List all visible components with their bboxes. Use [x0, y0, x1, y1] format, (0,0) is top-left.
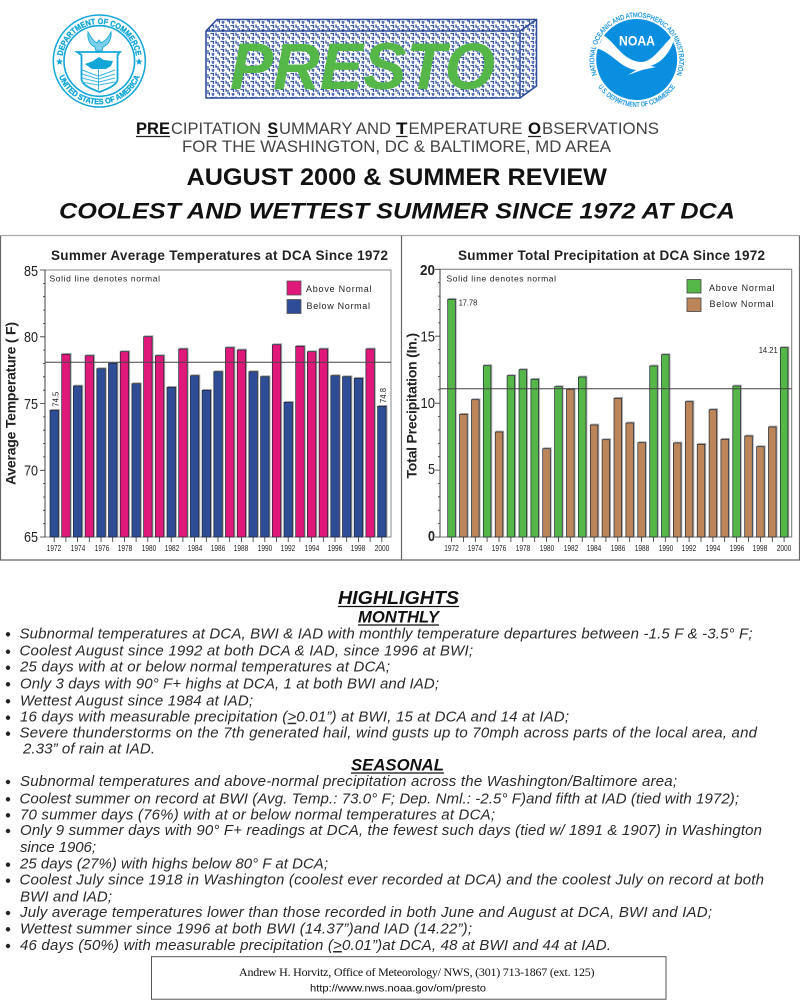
text block: seasonal bullets: 46 days (50%) with measurable precipitation (>0.01”)at DCA, 48 at BWI and 44 at IAD.	[20, 937, 611, 954]
icon: Department of Commerce seal: UNITED STATES OF AMERICA	[59, 74, 140, 104]
axis labels: temperature years: 1984	[188, 544, 203, 553]
panel: precipitation chart	[404, 248, 792, 553]
axis labels: temperature values	[24, 263, 38, 546]
icon: NOAA logo	[589, 12, 684, 107]
text block: seasonal bullets: Coolest July since 1918 in Washington (coolest ever recorded at DCA) and the coolest July on record at both	[20, 872, 764, 889]
axis title: precipitation: Total Precipitation (In.)	[404, 333, 420, 478]
text block: seasonal bullets: BWI and IAD;	[20, 888, 112, 905]
axis labels: precipitation years: 1976	[492, 544, 507, 553]
logo: PRESTO block: PRESTO	[230, 29, 495, 103]
label: 2000 temperature: 74.8	[378, 388, 388, 403]
heading: summary subtitle: COOLEST AND WETTEST SUMMER SINCE 1972 AT DCA	[59, 198, 735, 224]
text block: seasonal bullets: Only 9 summer days with 90° F+ readings at DCA, the fewest such days (tied w/ 1891 & 1907) in Washington	[20, 822, 762, 839]
text block: monthly bullets: Severe thunderstorms on the 7th generated hail, wind gusts up to 70mph across parts of the local area, and	[20, 725, 758, 742]
axis labels: precipitation years: 1990	[659, 544, 674, 553]
text block: seasonal bullets	[6, 773, 764, 954]
axis labels: temperature years: 1976	[95, 544, 110, 553]
bars: precipitation by year	[448, 299, 788, 537]
axis labels: precipitation years: 1980	[540, 544, 555, 553]
icon: Department of Commerce seal	[52, 14, 146, 108]
axis labels: temperature years: 1988	[234, 544, 249, 553]
heading: monthly: MONTHLY	[358, 609, 441, 627]
axis labels: temperature values: 65	[24, 529, 38, 546]
heading: seasonal: SEASONAL	[351, 757, 444, 775]
axis labels: temperature years: 1992	[281, 544, 296, 553]
axis labels: precipitation years: 1984	[587, 544, 602, 553]
axis labels: temperature years: 2000	[375, 544, 390, 553]
axis labels: precipitation values: 10	[420, 395, 435, 412]
heading: program name: T	[396, 120, 408, 138]
icon: Department of Commerce seal: DEPARTMENT OF COMMERCE	[57, 18, 142, 56]
heading: program name: S	[268, 120, 278, 138]
axis labels: temperature values: 75	[24, 396, 38, 413]
text block: monthly bullets: 2.33” of rain at IAD.	[22, 740, 155, 757]
text block: monthly bullets: 16 days with measurable precipitation (>0.01”) at BWI, 15 at DCA and 14 at IAD;	[20, 709, 569, 726]
axis labels: precipitation years: 1986	[611, 544, 626, 553]
axis labels: precipitation years: 1992	[682, 544, 697, 553]
axis labels: precipitation years: 1982	[564, 544, 579, 553]
axis labels: temperature years: 1994	[305, 544, 320, 553]
axis labels: temperature years: 1974	[71, 544, 86, 553]
axis labels: precipitation years: 1978	[516, 544, 531, 553]
text block: monthly bullets: Only 3 days with 90° F+ highs at DCA, 1 at both BWI and IAD;	[20, 675, 439, 692]
panel: credit box: Andrew H. Horvitz, Office of Meteorology/ NWS, (301) 713-1867 (ext. 125)	[239, 965, 594, 979]
heading: program name: PRE	[136, 120, 170, 138]
text block: monthly bullets: 25 days with at or below normal temperatures at DCA;	[19, 659, 390, 676]
legend: temperature: Below Normal	[306, 301, 370, 311]
axis labels: temperature years: 1978	[118, 544, 133, 553]
panel: chart frame	[0, 236, 800, 560]
text block: seasonal bullets: 70 summer days (76%) with at or below normal temperatures at DCA;	[20, 806, 495, 823]
axis labels: precipitation years: 1988	[635, 544, 650, 553]
heading: report title: AUGUST 2000 & SUMMER REVIEW	[186, 164, 607, 191]
heading: program name: EMPERATURE	[408, 120, 522, 138]
axis labels: temperature years: 1980	[142, 544, 157, 553]
legend: precipitation	[687, 280, 774, 312]
bars: temperature by year	[50, 337, 386, 537]
axis labels: temperature years: 1998	[351, 544, 366, 553]
heading: program name: O	[528, 120, 541, 138]
axis labels: precipitation years: 1998	[753, 544, 768, 553]
panel: temperature chart	[3, 248, 391, 553]
axis labels: temperature years	[47, 544, 390, 553]
panel: credit box: http://www.nws.noaa.gov/om/presto	[310, 984, 486, 995]
text block: monthly bullets: Coolest August since 1992 at both DCA & IAD, since 1996 at BWI;	[20, 643, 473, 660]
axis labels: precipitation values: 15	[420, 329, 435, 346]
text block: monthly bullets	[6, 625, 758, 757]
axis labels: temperature years: 1982	[165, 544, 180, 553]
axis labels: precipitation years: 2000	[777, 544, 792, 553]
axis labels: precipitation values: 5	[428, 461, 435, 478]
heading: program name: UMMARY AND	[279, 120, 391, 138]
chart title: precipitation: Summer Total Precipitation at DCA Since 1972	[458, 248, 765, 263]
axis labels: temperature years: 1990	[258, 544, 273, 553]
text block: seasonal bullets: 25 days (27%) with highs below 80° F at DCA;	[19, 856, 328, 873]
heading: program name: FOR THE WASHINGTON, DC & BALTIMORE, MD AREA	[182, 138, 611, 156]
text block: seasonal bullets: Subnormal temperatures and above-normal precipitation across the Washington/Baltimore area;	[20, 773, 677, 790]
text block: monthly bullets: Wettest August since 1984 at IAD;	[20, 692, 253, 709]
axis labels: precipitation years: 1994	[706, 544, 721, 553]
legend: temperature: Above Normal	[306, 284, 372, 294]
axis labels: precipitation years: 1996	[730, 544, 745, 553]
text block: seasonal bullets: since 1906;	[20, 839, 96, 856]
heading: highlights: HIGHLIGHTS	[338, 587, 460, 608]
text block: seasonal bullets: July average temperatures lower than those recorded in both June and August at DCA, BWI and IAD;	[19, 904, 712, 921]
axis labels: temperature values: 85	[24, 263, 38, 280]
note: normal line precipitation: Solid line denotes normal	[446, 274, 556, 284]
heading: program name: CIPITATION	[171, 120, 261, 138]
axis labels: temperature years: 1986	[211, 544, 226, 553]
note: normal line temperature: Solid line denotes normal	[50, 274, 160, 284]
axis labels: precipitation values: 20	[420, 262, 435, 279]
icon: NOAA logo: NATIONAL OCEANIC AND ATMOSPHERIC ADMINISTRATION	[589, 12, 684, 76]
label: 2000 precipitation: 14.21	[759, 345, 778, 355]
axis labels: precipitation years: 1972	[444, 544, 459, 553]
axis labels: precipitation years	[444, 544, 792, 553]
heading: program name	[136, 120, 659, 156]
label: 1972 precipitation: 17.78	[459, 298, 477, 308]
text block: seasonal bullets: Coolest summer on record at BWI (Avg. Temp.: 73.0° F; Dep. Nml.: -2.5° F)and fifth at IAD (tied with 1972);	[20, 790, 739, 807]
text block: monthly bullets: Subnormal temperatures at DCA, BWI & IAD with monthly temperature departures between -1.5 F & -3.5° F;	[20, 625, 752, 642]
icon: NOAA logo: U.S. DEPARTMENT OF COMMERCE	[598, 84, 676, 107]
text block: seasonal bullets: Wettest summer since 1996 at both BWI (14.37”)and IAD (14.22”);	[20, 920, 472, 937]
panel: credit box	[152, 957, 666, 999]
axis labels: temperature years: 1972	[47, 544, 62, 553]
axis labels: precipitation values	[420, 262, 435, 545]
icon: NOAA logo: NOAA	[619, 34, 655, 48]
axis labels: precipitation values: 0	[428, 528, 435, 545]
axis labels: temperature years: 1996	[328, 544, 343, 553]
legend: temperature	[287, 281, 372, 314]
axis title: temperature: Average Temperature ( F)	[3, 322, 19, 485]
axis labels: temperature values: 80	[24, 329, 38, 346]
legend: precipitation: Below Normal	[710, 299, 774, 309]
axis labels: temperature values: 70	[24, 463, 38, 480]
axis labels: precipitation years: 1974	[468, 544, 483, 553]
label: 1972 temperature: 74.5	[50, 391, 60, 407]
chart title: temperature: Summer Average Temperatures at DCA Since 1972	[51, 248, 388, 263]
heading: program name: BSERVATIONS	[542, 120, 659, 138]
legend: precipitation: Above Normal	[709, 283, 774, 293]
